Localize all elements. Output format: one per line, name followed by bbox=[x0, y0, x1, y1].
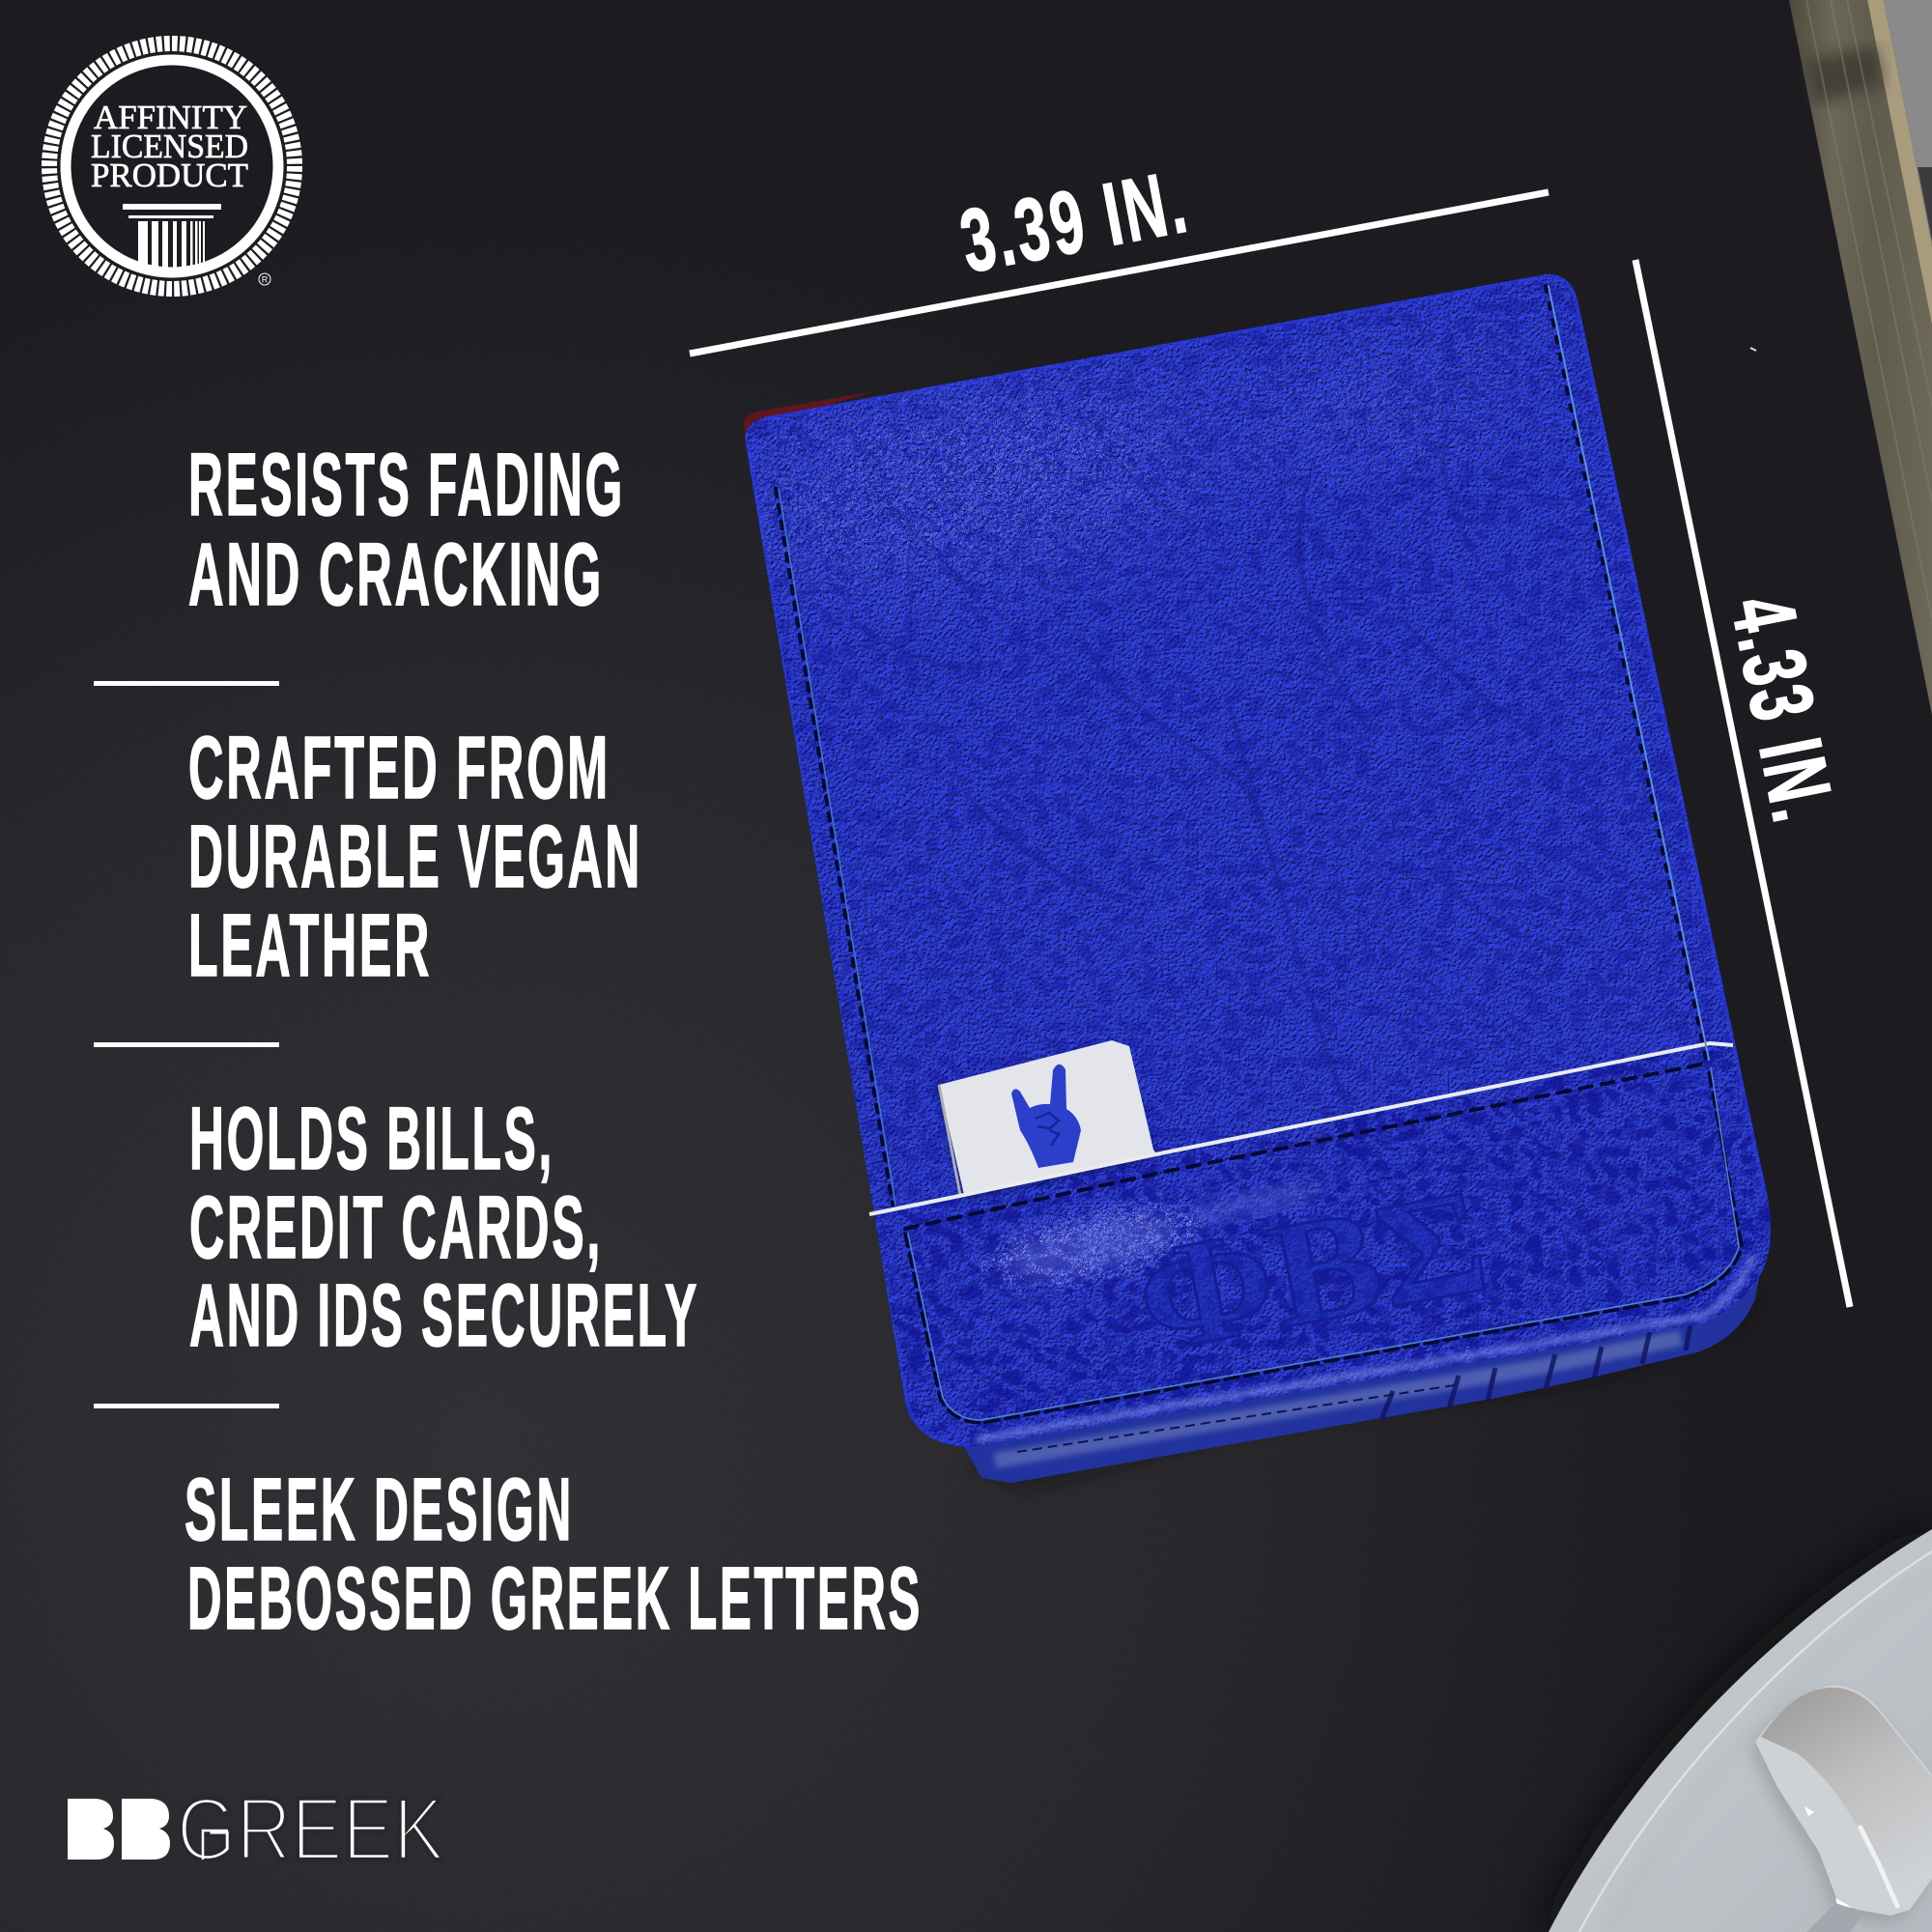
dimension: height line and label: 4.33 IN. bbox=[1712, 588, 1853, 832]
seal text bbox=[91, 99, 248, 194]
feature: sleek design: SLEEK DESIGN bbox=[185, 1461, 574, 1559]
feature: holds bills: AND IDS SECURELY bbox=[189, 1266, 699, 1365]
pocket lip highlight bbox=[976, 1256, 1753, 1439]
dimension: width line and label bbox=[690, 152, 1548, 354]
seal column bbox=[123, 204, 221, 270]
cup handle bbox=[1749, 1686, 1932, 1932]
feature: holds bills: CREDIT CARDS, bbox=[189, 1179, 603, 1277]
book frame in top right corner bbox=[1789, 0, 1932, 715]
feature: sleek design bbox=[185, 1461, 923, 1648]
feature: vegan leather: LEATHER bbox=[188, 896, 432, 995]
feature: resists fading bbox=[188, 436, 625, 624]
dimension: width line and label: 3.39 IN. bbox=[953, 152, 1197, 292]
pocket piping bbox=[869, 1043, 1733, 1214]
wallet back layer bbox=[744, 391, 1763, 1483]
feature: sleek design: DEBOSSED GREEK LETTERS bbox=[187, 1549, 923, 1648]
seal text: PRODUCT bbox=[91, 156, 248, 194]
seal: affinity licensed product bbox=[49, 43, 295, 289]
feature: vegan leather bbox=[188, 719, 642, 995]
feature: holds bills: HOLDS BILLS, bbox=[189, 1090, 554, 1188]
feature: holds bills bbox=[189, 1090, 699, 1365]
feature: vegan leather: DURABLE VEGAN bbox=[188, 808, 642, 906]
logo BB mark bbox=[68, 1799, 170, 1860]
feature: resists fading: RESISTS FADING bbox=[188, 436, 625, 534]
wallet bbox=[715, 261, 1787, 1492]
feature: vegan leather: CRAFTED FROM bbox=[188, 719, 611, 817]
speck on surface bbox=[1750, 348, 1756, 351]
saucer shadow bbox=[1536, 1517, 1932, 1932]
feature: resists fading: AND CRACKING bbox=[188, 526, 604, 624]
stitching bbox=[776, 286, 1742, 1423]
wallet shadow bbox=[966, 1294, 1760, 1492]
registered mark bbox=[259, 273, 270, 285]
saucer and cup handle bbox=[1548, 1529, 1932, 1932]
wallet front leather bbox=[715, 261, 1787, 1459]
registered mark: R bbox=[262, 274, 269, 284]
logo: BB Greek bbox=[68, 1780, 444, 1879]
pocket leather bbox=[874, 1046, 1771, 1447]
card slot shadow bbox=[935, 1041, 1159, 1202]
seal text: LICENSED bbox=[91, 128, 248, 165]
leather wrinkles bbox=[850, 415, 1565, 1140]
logo wordmark: GREEK bbox=[177, 1780, 444, 1879]
seal text: AFFINITY bbox=[94, 99, 247, 136]
dimension: height line and label bbox=[1635, 260, 1853, 1307]
white card with hand icon bbox=[939, 1040, 1157, 1195]
debossed greek letters: ΦΒΣ bbox=[1124, 1156, 1499, 1384]
